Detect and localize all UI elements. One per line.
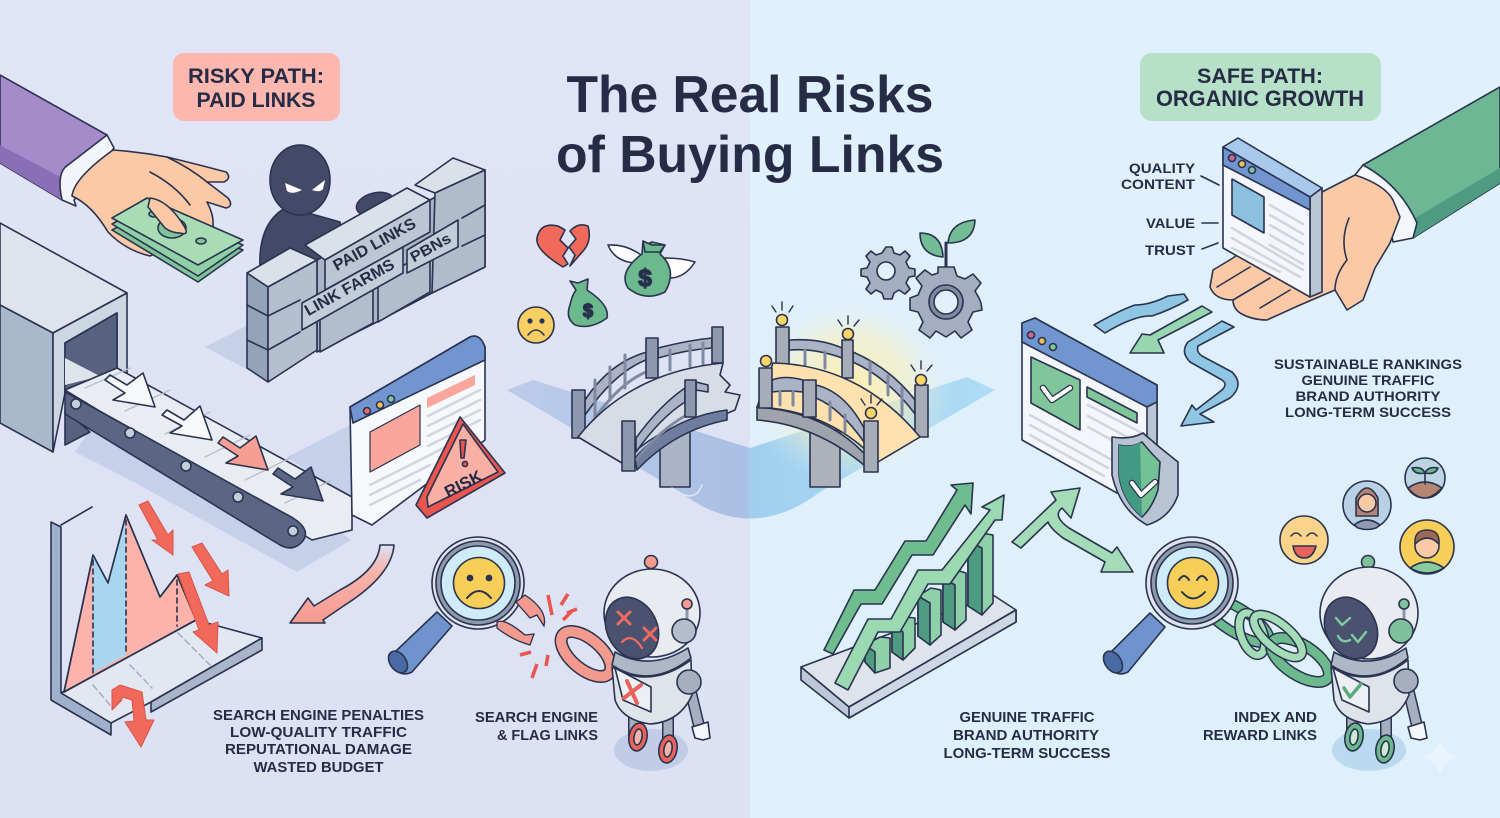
conveyor belt [65,368,352,548]
text: search engine flag links [475,709,598,744]
label: value [1146,215,1218,231]
icon: tunnel [0,223,127,452]
arrow: green [1130,306,1212,353]
icon: cursors on belt [105,373,323,501]
label: quality content [1121,160,1219,192]
icon: magnifier sad [385,537,524,676]
arrow: pink curved [290,545,394,623]
panel: risky path background [0,0,750,818]
text: search engine penalties list: REPUTATIONAL DAMAGE [225,741,412,758]
icon: magnifier happy [1100,537,1238,676]
brick wall with link labels [247,158,485,382]
title: The Real Risks [566,66,934,124]
robot: happy [1314,556,1427,771]
label: risky path [173,53,340,121]
icon: flying money bag [608,241,695,296]
icon: small money bag: $ [583,301,593,321]
icon: person avatar woman [1343,481,1391,530]
text: search engine penalties list: WASTED BUDGET [254,759,384,776]
text: genuine traffic list: GENUINE TRAFFIC [960,709,1095,726]
wall shadow [205,325,248,370]
icon: red down arrows [112,501,229,747]
text: index and reward links: INDEX AND [1234,709,1317,726]
icon: green chain [1197,590,1336,691]
text: search engine flag links: SEARCH ENGINE [475,709,598,726]
arrow: green splitting [1012,488,1133,572]
icon: website with shield [1022,318,1178,525]
text: genuine traffic list: BRAND AUTHORITY [953,727,1099,744]
text: sustainable rankings list: GENUINE TRAFFIC [1302,372,1434,388]
icon: broken chain [497,594,619,685]
title [556,66,944,184]
label: safe path: ORGANIC GROWTH [1156,86,1364,111]
chart: crashing traffic [51,507,262,735]
label: safe path [1140,53,1381,121]
icon: large gear with sprout [910,220,982,338]
icon: small money bag [568,279,607,326]
icon: website at risk [350,336,485,525]
text: RISK: RISK [441,466,486,502]
icon: person avatar man [1400,520,1454,574]
icon: small gear [861,247,915,299]
arrow: blue wavy band [1094,294,1188,333]
label: risky path: RISKY PATH: [188,65,324,88]
icon: flying money bag: $ [638,265,652,292]
text: search engine penalties list: LOW-QUALITY TRAFFIC [230,724,407,741]
text: index and reward links: REWARD LINKS [1203,727,1317,744]
text: search engine penalties list: SEARCH ENGINE PENALTIES [213,707,424,724]
icon: broken heart [537,225,589,267]
bridge: broken [572,327,740,496]
text: genuine traffic list [944,709,1110,762]
bridge glow [745,295,955,485]
icon: plant badge [1405,458,1445,498]
icon: sparkle watermark [1422,739,1458,777]
wall label: link farms: LINK FARMS [302,256,398,320]
chart: rising bars and arrows [801,483,1016,718]
bricks lower row [320,250,430,352]
icon: hand offering content [1210,87,1500,320]
icon: happy face [1280,516,1328,564]
panel: safe path background [750,0,1500,818]
text: sustainable rankings list: SUSTAINABLE RANKINGS [1274,356,1462,372]
icon: masked figure [260,145,396,268]
shadows under conveyor [75,415,352,572]
label: value: VALUE [1146,215,1195,231]
icon: sad face [518,307,554,343]
river under bridges [507,377,995,518]
label: safe path: SAFE PATH: [1197,65,1323,88]
label: trust [1145,242,1218,258]
text: search engine penalties list [213,707,424,776]
text: sustainable rankings list [1274,356,1462,420]
text: sustainable rankings list: BRAND AUTHORITY [1296,388,1441,404]
wall label: paid links: PAID LINKS [330,215,419,275]
label: quality content: QUALITY [1129,160,1196,176]
text: index and reward links [1203,709,1317,744]
robot: sad [595,556,710,771]
icon: risk warning triangle [416,417,505,518]
label: risky path: PAID LINKS [196,89,316,112]
text: search engine flag links: & FLAG LINKS [497,727,598,744]
label: quality content: CONTENT [1121,176,1195,192]
title: of Buying Links [556,126,944,184]
wall label: PBNs: PBNs [407,230,454,266]
icon: hand paying money [0,75,243,282]
bridge: safe and glowing [757,302,932,487]
arrow: blue curved [1181,321,1238,426]
label: trust: TRUST [1145,242,1195,258]
text: sustainable rankings list: LONG-TERM SUCCESS [1285,404,1451,420]
text: genuine traffic list: LONG-TERM SUCCESS [944,745,1110,762]
